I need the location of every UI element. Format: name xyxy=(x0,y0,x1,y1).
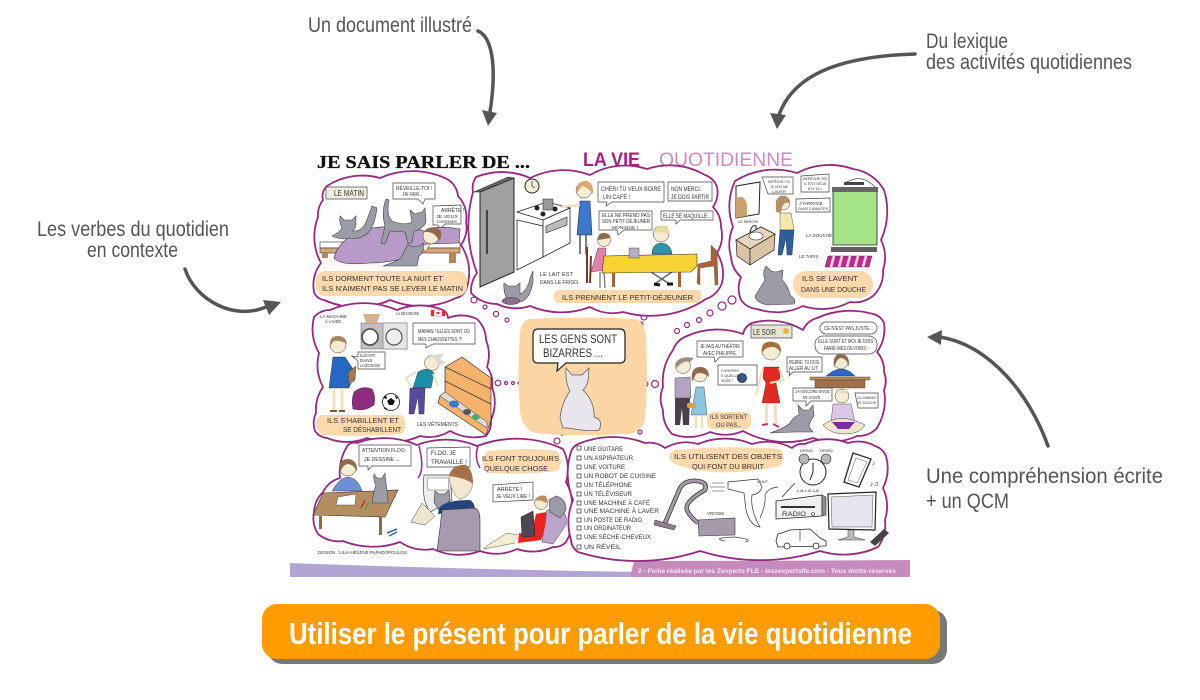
caption: ILS SORTENT xyxy=(710,415,747,421)
bath mat xyxy=(825,256,872,267)
seated boy xyxy=(823,388,865,434)
speech: ça commence xyxy=(855,393,878,408)
label: du lexique: des activités quotidiennes xyxy=(926,51,1132,74)
speech: tu rentres: À QUELLE xyxy=(721,373,739,378)
panel: le matin xyxy=(313,171,469,307)
panel: ils font toujours xyxy=(313,438,572,555)
label: compréhension écrite: + un QCM xyxy=(926,490,1009,513)
couple xyxy=(675,357,709,428)
TV xyxy=(828,492,876,540)
backpack xyxy=(352,388,375,410)
speech: attention xyxy=(359,445,411,470)
arrow: lexique xyxy=(770,54,915,129)
arrow: document xyxy=(478,31,497,126)
speech text: DANS 2 MINUTES xyxy=(798,206,828,211)
chair xyxy=(697,245,718,285)
clock xyxy=(525,179,539,193)
speech: monique: ELLE NE PREND PAS xyxy=(602,213,650,219)
panel: le soir xyxy=(661,311,886,442)
stripes xyxy=(831,256,866,267)
checklist text: UNE GUITARE xyxy=(584,446,624,453)
checklist text: UN ROBOT DE CUISINE xyxy=(584,473,657,480)
worksheet title: LA VIE xyxy=(583,150,640,171)
table xyxy=(602,248,697,287)
footer band: pink credit: 2 - Fiche réalisée par les Zexperts FLE - leszexpertsfle.com - Tous droits réservés xyxy=(638,568,896,575)
worksheet illustration xyxy=(290,150,910,577)
label: compréhension écrite xyxy=(926,465,1163,513)
note: le lait xyxy=(540,272,578,286)
speech: travaille xyxy=(427,447,470,467)
speech text: JE DOIS ME xyxy=(770,184,788,189)
cat B xyxy=(381,199,426,244)
sink xyxy=(736,226,775,265)
radio xyxy=(776,483,826,519)
woman with bag xyxy=(329,336,356,411)
speech: arrête xyxy=(433,205,464,229)
caption: ILS SE LAVENT xyxy=(802,274,858,283)
fridge xyxy=(474,177,514,287)
banner: main objective xyxy=(262,604,947,664)
caption: ILS N'AIMENT PAS SE LEVER LE MATIN xyxy=(322,284,463,293)
checklist text: UNE VOITURE xyxy=(584,464,626,471)
speech: sécheuse: LA SÉCHEUSE xyxy=(360,362,380,368)
checklist text: UNE SÈCHE-CHEVEUX xyxy=(584,532,652,541)
speech: envie de jouer: J'AI ENCORE ENVIE xyxy=(795,389,830,394)
speech: attention: ATTENTION FLOO, xyxy=(362,448,406,454)
caption: ILS UTILISENT DES OBJETS xyxy=(674,452,782,461)
caption: DANS UNE DOUCHE xyxy=(801,285,866,294)
footer band: lavender xyxy=(290,563,640,577)
box: le matin xyxy=(326,187,367,199)
labels: À LAVER xyxy=(325,318,342,324)
worksheet title: JE SAIS PARLER DE ... xyxy=(317,152,530,172)
speech: monique: MONIQUE ! xyxy=(612,225,638,230)
mirror xyxy=(736,182,760,224)
mirror: LE MIROIR xyxy=(738,219,759,224)
drawing woman xyxy=(332,459,362,491)
speech: sécheuse xyxy=(352,352,385,369)
label: du lexique: Du lexique xyxy=(926,30,1008,53)
caption xyxy=(707,412,751,429)
speech: chéri: UN CAFÉ ! xyxy=(603,192,630,201)
speech: arrête: JE VEUX xyxy=(436,214,458,219)
desk xyxy=(313,490,398,536)
speech: maman: MES CHAUSSETTES ?! xyxy=(418,337,462,343)
speech: non merci: JE DOIS PARTIR xyxy=(671,195,710,201)
cat A xyxy=(332,206,377,239)
label: compréhension écrite: Une compréhension écrite xyxy=(926,465,1163,488)
speech: arrête: DORMIR xyxy=(437,219,457,224)
worksheet title xyxy=(317,150,793,172)
caption: ILS PRENNENT LE PETIT-DÉJEUNER xyxy=(562,293,694,302)
remote xyxy=(870,529,889,546)
labels: LA MACHINE xyxy=(320,314,347,319)
speech: ça commence: DE SOUCHE xyxy=(857,401,877,405)
speech: chéri xyxy=(598,182,664,206)
alarm clock xyxy=(799,448,833,485)
speech: travaille: TRAVAILLE ! xyxy=(431,460,467,466)
checklist xyxy=(577,446,581,549)
bed xyxy=(320,227,460,264)
speech text: LA DOUCHE xyxy=(806,233,832,238)
checklist text: UN ORDINATEUR xyxy=(584,525,631,532)
man at computer xyxy=(438,465,475,514)
panel: objets qui font du bruit xyxy=(568,437,889,561)
girl at desk xyxy=(810,354,870,388)
stove xyxy=(517,199,570,270)
speech: arrête: ARRÊTE ! xyxy=(441,206,464,214)
box: le soir: LE SOIR xyxy=(753,328,776,337)
speech: non merci xyxy=(668,182,712,201)
person brushing teeth xyxy=(776,196,794,255)
dresser xyxy=(438,357,491,435)
tablet xyxy=(844,453,879,488)
caption xyxy=(669,447,784,472)
washing machine and dryer xyxy=(361,314,407,349)
cat and bowl xyxy=(502,271,533,304)
speech: attention: JE DESSINE ... xyxy=(364,457,400,463)
hair dryer xyxy=(710,479,778,527)
caption: OU PAS... xyxy=(716,423,742,429)
speech: maman xyxy=(413,323,475,348)
speech: sécheuse: ELLES SONT xyxy=(360,353,375,358)
cloud speech: devoirs xyxy=(815,336,877,354)
note: le lait: DANS LE FRIGO xyxy=(540,280,578,286)
caption: QUELQUE CHOSE xyxy=(484,464,548,473)
arrow: compréhension xyxy=(927,330,1048,446)
footer band: pink credit xyxy=(630,560,910,577)
speech: monique: SON PETIT-DÉJEUNER xyxy=(602,218,650,225)
speech text: IL EST DÉJÀ xyxy=(804,181,826,186)
speech: envie de jouer: DE JOUER... xyxy=(803,395,823,400)
caption: ILS DORMENT TOUTE LA NUIT ET xyxy=(322,274,443,283)
speech: maquille: ELLE SE MAQUILLE... xyxy=(663,214,711,220)
caption: ILS FONT TOUJOURS xyxy=(482,454,559,463)
caption: SE DÉSHABILLENT xyxy=(343,425,401,434)
banner: main objective: Utiliser le présent pour parler de la vie quotidienne xyxy=(289,616,912,651)
checklist text: UN ASPIRATEUR xyxy=(584,455,633,462)
labels: LES VÊTEMENTS xyxy=(417,420,459,428)
speech: ça commence: ÇA COMMENCE xyxy=(857,396,876,400)
speech text xyxy=(768,176,832,259)
speech: pierre: ALLER AU LIT. xyxy=(789,366,819,372)
panel: les gens sont bizarres xyxy=(518,318,647,435)
speech: je veux lire: ARRÊTE ! xyxy=(497,485,523,493)
radio: RADIO xyxy=(782,511,806,518)
man at table xyxy=(651,226,673,285)
cat on desk xyxy=(372,473,388,503)
speech: tu rentres: HEURE ? xyxy=(721,378,734,383)
cat C xyxy=(383,243,424,266)
speech: réveille-toi xyxy=(393,183,435,204)
cloud speech: devoirs: ELLE SORT ET MOI JE DOIS xyxy=(818,339,874,345)
caption xyxy=(793,271,873,298)
checklist text: UN TÉLÉPHONE xyxy=(584,480,633,489)
caption: QUI FONT DU BRUIT xyxy=(692,462,764,471)
label: les verbes: en contexte xyxy=(87,239,178,262)
speech: réveille-toi: RÉVEILLE-TOI ! xyxy=(396,185,432,192)
checklist text: UNE MACHINE À LAVER xyxy=(584,506,659,515)
labels: LA SÉCHEUSE xyxy=(396,310,419,316)
speech: sécheuse: DANS xyxy=(360,358,373,363)
speech: réveille-toi: J'AI FAIM... xyxy=(402,192,422,198)
cat grey xyxy=(770,405,814,433)
person sleeping xyxy=(421,227,441,252)
speech text: DÉPÊCHE-TOI xyxy=(768,179,790,184)
hair dryer: CHUT xyxy=(757,479,769,484)
caption xyxy=(316,415,406,436)
worksheet title: QUOTIDIENNE xyxy=(659,150,793,171)
checklist text: UN RÉVEIL xyxy=(584,542,621,551)
caption xyxy=(482,449,561,474)
credit: DESIGN : LILIA HÉLÈNE PAPADOPOULOU xyxy=(318,549,407,555)
car xyxy=(776,529,826,549)
flag xyxy=(431,310,445,316)
speech: je veux lire: JE VEUX LIRE ! xyxy=(496,494,530,500)
cat sitting xyxy=(560,368,601,431)
checklist text xyxy=(584,446,659,551)
speech boxes xyxy=(762,174,830,212)
speech: les gens: LES GENS SONT xyxy=(539,332,618,346)
alarm clock: DRING xyxy=(800,448,813,453)
vacuum cleaner xyxy=(654,481,748,542)
divider curves xyxy=(418,446,480,478)
speech: travaille: FLOO, JE xyxy=(431,451,456,457)
speech: les gens xyxy=(533,329,625,371)
speech: non merci: NON MERCI. xyxy=(671,186,701,193)
cloud speech: devoirs: FAIRE MES DEVOIRS xyxy=(824,346,867,352)
arrow: verbes xyxy=(185,269,281,315)
radio: LA LA LA xyxy=(797,488,819,493)
speech: maquille xyxy=(661,211,713,224)
speech text: J'ARRIVE xyxy=(799,201,823,206)
speech: tu rentres xyxy=(718,365,757,385)
panel: vêtements xyxy=(313,303,495,442)
box: le matin: LE MATIN xyxy=(334,189,364,198)
label: les verbes: Les verbes du quotidien xyxy=(37,218,229,241)
shower xyxy=(831,179,878,252)
panel: douche xyxy=(729,165,887,312)
speech text: DÉPÊCHE-TOI xyxy=(803,176,827,181)
speech text: LE TAPIS xyxy=(799,254,818,259)
alarm clock: DRING xyxy=(820,448,833,453)
speech: pierre xyxy=(787,357,822,376)
caption xyxy=(554,290,702,303)
thought bubble dots xyxy=(471,296,736,444)
checklist text: UNE MACHINE À CAFÉ xyxy=(584,498,651,507)
vacuum cleaner: VROOM xyxy=(707,511,724,516)
caption xyxy=(316,271,467,296)
speech: chéri: CHÉRI TU VEUX BOIRE xyxy=(601,184,662,193)
speech: tu rentres: TU RENTRES xyxy=(721,368,739,373)
label: du lexique xyxy=(926,30,1132,74)
tablet: ♪♫ xyxy=(870,481,879,488)
labels xyxy=(320,310,459,428)
speech: envie de jouer xyxy=(793,388,832,406)
speech: je veux lire xyxy=(493,482,533,502)
reading woman xyxy=(484,496,566,549)
speech: théâtre: JE VAIS AU THÉÂTRE xyxy=(700,343,740,350)
label: un document illustré: Un document illustré xyxy=(308,14,472,37)
man searching xyxy=(406,353,445,414)
checklist text: UN POSTE DE RADIO xyxy=(584,517,642,524)
speech: les gens: BIZARRES ... xyxy=(543,346,603,360)
caption: ILS S'HABILLENT ET xyxy=(327,416,399,425)
girl at table xyxy=(587,233,610,288)
speech: pierre: PIERRE, TU DOIS xyxy=(789,360,819,366)
box: le soir xyxy=(751,325,792,338)
computer xyxy=(411,475,452,525)
cloud speech: pas juste: CE N'EST PAS JUSTE... xyxy=(824,326,873,332)
panel: petit-déjeuner xyxy=(468,165,723,316)
football xyxy=(382,394,400,410)
woman standing xyxy=(560,181,593,254)
speech: théâtre: AVEC PHILIPPE xyxy=(703,351,736,357)
tablet: ♪ xyxy=(872,460,876,467)
cat licking xyxy=(755,266,795,305)
speech: monique xyxy=(599,211,652,235)
label: les verbes xyxy=(37,218,229,262)
speech text: 8 H 15 ! xyxy=(808,186,822,191)
note: le lait: LE LAIT EST xyxy=(540,272,573,278)
office chair xyxy=(437,508,480,551)
woman in red dress xyxy=(756,342,784,427)
checklist text: UN TÉLÉVISEUR xyxy=(584,489,632,498)
speech: théâtre xyxy=(697,341,743,362)
speech: maman: MAMAN ! ELLES SONT OÙ xyxy=(418,328,470,335)
cloud speech: pas juste xyxy=(820,322,877,334)
speech text: LAVER xyxy=(772,189,786,194)
